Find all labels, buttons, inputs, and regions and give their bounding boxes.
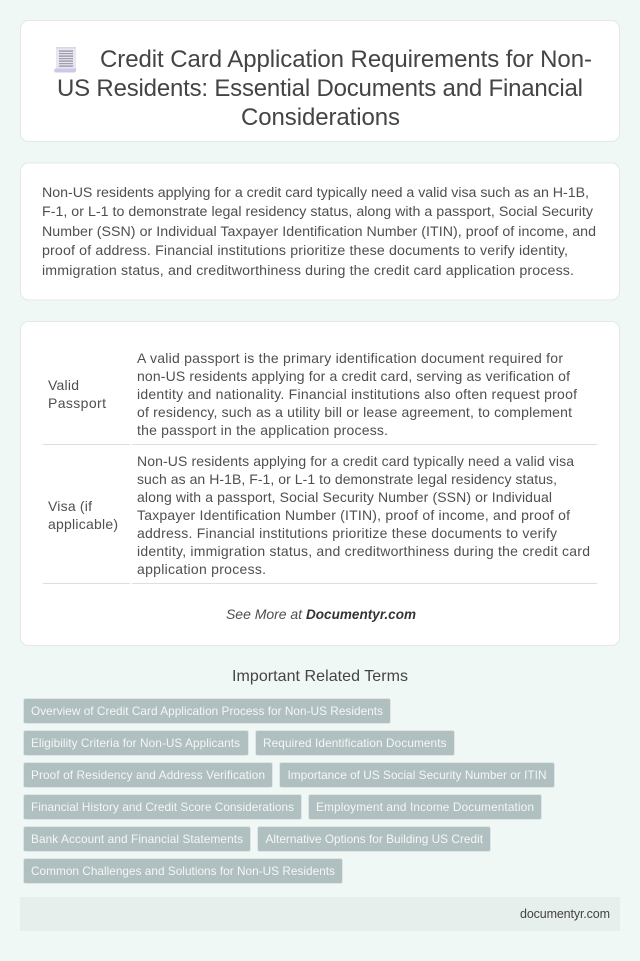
row text: visa: along with a passport, Social Security Number (SSN) or Individual xyxy=(137,489,552,505)
tag xyxy=(308,794,542,820)
row text: valid passport xyxy=(137,350,577,438)
row label: valid passport: Valid xyxy=(48,377,79,393)
tag xyxy=(24,826,250,852)
tag: Bank Account and Financial Statements xyxy=(31,832,243,846)
link: see more xyxy=(226,606,416,622)
tag xyxy=(24,762,272,788)
panel: introduction xyxy=(20,163,620,300)
tag: Alternative Options for Building US Credit xyxy=(266,832,484,846)
row text: valid passport: identity and nationality. Financial institutions also often request proof xyxy=(137,386,577,402)
row text: visa: Non-US residents applying for a credit card typically need a valid visa xyxy=(137,453,574,469)
row text: valid passport: the passport in the application process. xyxy=(137,422,388,438)
row label: valid passport xyxy=(48,377,106,411)
row label: visa xyxy=(48,498,118,532)
row text: visa: such as an H-1B, F-1, or L-1 to demonstrate legal residency status, xyxy=(137,471,557,487)
row text: valid passport: A valid passport is the primary identification document required for xyxy=(137,350,563,366)
tag: Overview of Credit Card Application Process for Non-US Residents xyxy=(31,704,383,718)
tag xyxy=(24,730,248,756)
tag xyxy=(280,762,554,788)
row text: visa: Taxpayer Identification Number (ITIN), proof of income, and proof of xyxy=(137,507,570,523)
heading: important related terms: Important Related Terms xyxy=(232,668,408,685)
text block: introduction paragraph: F-1, or L-1 to demonstrate legal residency status, along with a passport, Social Security xyxy=(42,204,594,220)
row label: valid passport: Passport xyxy=(48,395,106,411)
row text: visa: address. Financial institutions prioritize these documents to verify xyxy=(137,525,557,541)
tag: Proof of Residency and Address Verification xyxy=(31,768,265,782)
panel: related term tags xyxy=(24,698,554,884)
tag: Required Identification Documents xyxy=(263,736,447,750)
row label: visa: applicable) xyxy=(48,516,118,532)
panel: requirements table xyxy=(20,322,620,646)
panel: title card xyxy=(20,20,620,142)
tag: Financial History and Credit Score Considerations xyxy=(31,800,294,814)
text block: introduction paragraph: Non-US residents applying for a credit card typically need a valid visa such as an H-1B, xyxy=(42,185,589,201)
tag: Employment and Income Documentation xyxy=(316,800,534,814)
row text: visa: application process. xyxy=(137,561,266,577)
row label: visa: Visa (if xyxy=(48,498,92,514)
icon: document scroll xyxy=(54,47,76,72)
footer xyxy=(20,897,620,931)
title: Credit Card Application Requirements for Non- xyxy=(100,46,592,73)
title: US Residents: Essential Documents and Financial xyxy=(57,75,583,102)
link: see more: See More at xyxy=(226,606,303,622)
text block: introduction paragraph: proof of address. Financial institutions prioritize these documents to verify identity, xyxy=(42,243,568,259)
tag: Importance of US Social Security Number or ITIN xyxy=(288,768,546,782)
title xyxy=(57,46,592,131)
text block: introduction paragraph: Number (SSN) or Individual Taxpayer Identification Number (ITIN), proof of income, and xyxy=(42,224,596,240)
tag xyxy=(24,858,342,884)
table row: valid passport xyxy=(48,350,577,438)
row text: visa: identity, immigration status, and creditworthiness during the credit card xyxy=(137,543,590,559)
row text: valid passport: non-US residents applying for a credit card, serving as verification of xyxy=(137,368,570,384)
title: Considerations xyxy=(241,104,400,131)
tag xyxy=(24,698,390,724)
tag xyxy=(24,794,302,820)
text block: introduction paragraph xyxy=(42,185,596,279)
tag xyxy=(258,826,490,852)
row text: visa xyxy=(137,453,590,577)
text block: introduction paragraph: immigration status, and creditworthiness during the credit card application process. xyxy=(42,263,574,279)
tag xyxy=(256,730,454,756)
footer: documentyr.com xyxy=(520,907,610,921)
tag: Eligibility Criteria for Non-US Applicants xyxy=(31,736,240,750)
table row: visa xyxy=(48,453,590,577)
row text: valid passport: of residency, such as a utility bill or lease agreement, to complement xyxy=(137,404,572,420)
tag: Common Challenges and Solutions for Non-US Residents xyxy=(31,864,335,878)
link: see more: Documentyr.com xyxy=(306,607,416,622)
